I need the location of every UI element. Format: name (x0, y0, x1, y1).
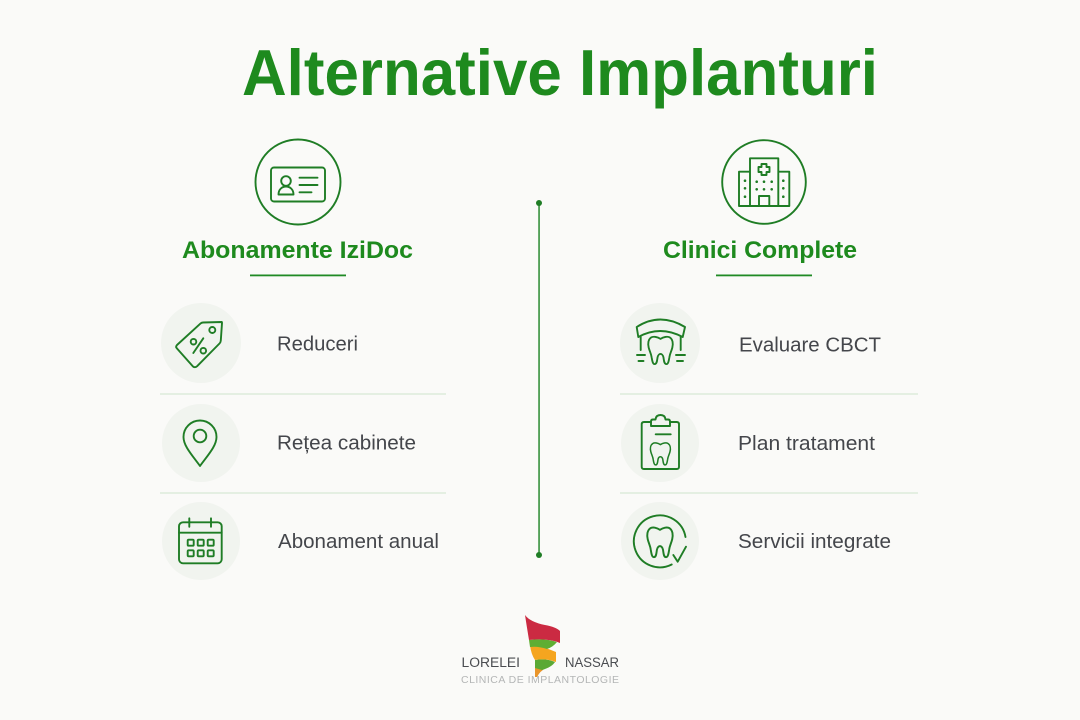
label: Evaluare CBCT: Evaluare CBCT (739, 334, 881, 356)
icon: clipboard with tooth (642, 415, 679, 469)
logo: Lorelei Nassar (461, 615, 619, 686)
heading underline (716, 274, 812, 276)
icon: hospital in circle (722, 140, 806, 224)
row: Abonament anual (162, 502, 439, 580)
vertical divider with end dots (536, 200, 542, 558)
panel: Clinici Complete (620, 140, 918, 580)
heading: Clinici Complete: Clinici Complete (663, 237, 857, 264)
icon: CBCT scanner and tooth (637, 320, 685, 364)
row: Reduceri (161, 303, 358, 383)
label: Servicii integrate: Servicii integrate (738, 531, 891, 553)
label: Abonament anual: Abonament anual (278, 531, 439, 553)
icon: ID card in circle (256, 140, 340, 224)
panel: Abonamente IziDoc (160, 140, 446, 580)
heading underline (250, 274, 346, 276)
row: Servicii integrate (621, 502, 891, 580)
icon: map pin (184, 421, 216, 466)
label: Reduceri: Reduceri (277, 334, 358, 356)
logo subtitle: CLINICA DE IMPLANTOLOGIE (461, 674, 619, 686)
label: Plan tratament: Plan tratament (738, 433, 875, 455)
row: Evaluare CBCT (620, 303, 881, 383)
logo ribbon (525, 615, 560, 677)
row: Plan tratament (621, 404, 875, 482)
logo text: LORELEI: LORELEI (462, 655, 520, 670)
row: Rețea cabinete (162, 404, 416, 482)
icon: price tag (176, 322, 222, 367)
heading: Abonamente IziDoc: Abonamente IziDoc (182, 237, 413, 264)
title: Alternative Implanturi (242, 36, 878, 109)
icon: tooth with check in circular arc (634, 515, 686, 567)
icon: calendar (179, 518, 222, 563)
label: Rețea cabinete: Rețea cabinete (277, 432, 416, 454)
logo text: NASSAR: NASSAR (565, 655, 619, 670)
